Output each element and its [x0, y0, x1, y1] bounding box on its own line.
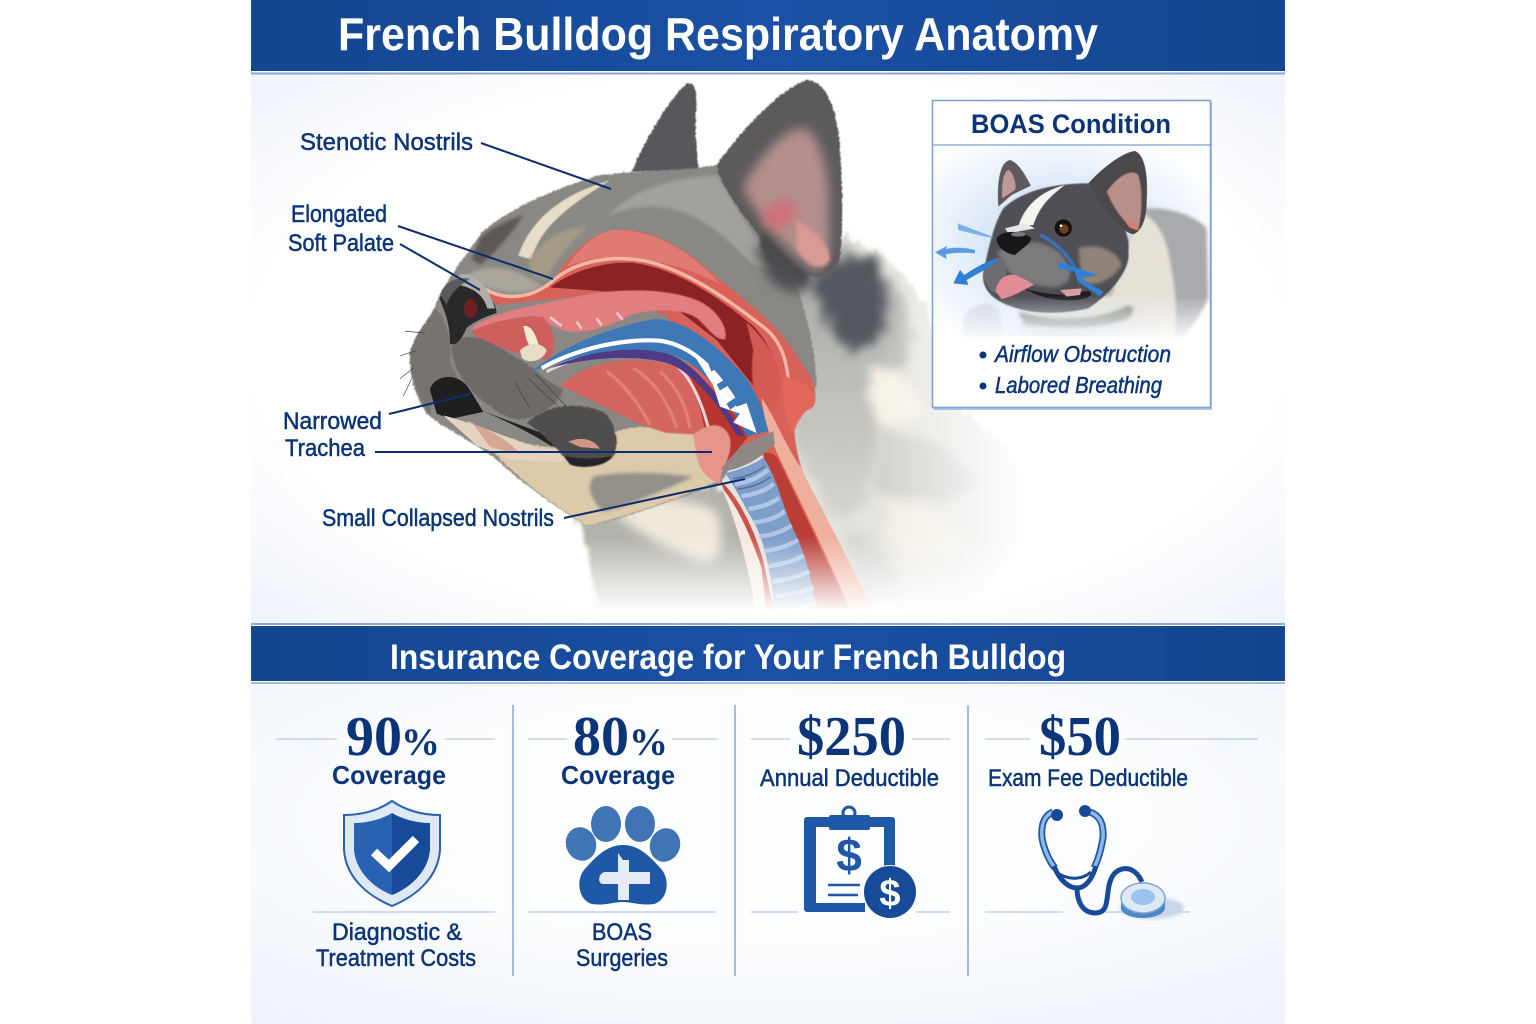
stat: 90% coverage: 90: [346, 706, 402, 768]
trachea rings: [725, 458, 817, 608]
leader lines: narrowed trachea: [375, 394, 712, 452]
stat: $50 exam fee deductible: Exam Fee Deductible: [988, 765, 1188, 792]
label: elongated soft palate: Elongated: [291, 201, 387, 228]
anatomical illustration: french bulldog head cross-section: [400, 78, 990, 608]
stat: 90% coverage: Coverage: [332, 760, 446, 790]
stat: 80% coverage: Surgeries: [576, 945, 668, 972]
stat: 90% coverage: Treatment Costs: [316, 945, 476, 972]
dark pharynx cavity: [550, 263, 777, 396]
stat: $250 annual deductible: $250: [797, 706, 906, 768]
soft palate band: [488, 229, 849, 606]
stat: 80% coverage: [561, 706, 685, 972]
icon: paw with medical cross: [561, 806, 685, 905]
airflow arrows: [935, 223, 1103, 297]
bullet list: Airflow Obstruction: [993, 341, 1171, 367]
stat: 80% coverage: BOAS: [592, 919, 652, 946]
muzzle: [410, 308, 617, 467]
stat: 80% coverage: Coverage: [561, 760, 675, 790]
pale lingual strip: [547, 352, 708, 428]
airway white streak and arrow: [542, 340, 757, 433]
blue airway: [532, 319, 768, 436]
palate pale line: [486, 256, 790, 378]
leader line: small collapsed nostrils: [564, 479, 745, 518]
bullet list: [980, 341, 1171, 398]
right pale tissue band: [762, 398, 868, 604]
forehead stripes: [518, 180, 610, 259]
icon: stethoscope: [1042, 805, 1184, 919]
bullet list: Labored Breathing: [995, 372, 1162, 398]
upper lip: [452, 337, 563, 420]
label: narrowed trachea: [283, 408, 382, 462]
section heading: Insurance Coverage for Your French Bulldog: [390, 638, 1066, 677]
leader lines: elongated soft palate: [398, 226, 553, 290]
label: stenotic nostrils: Stenotic Nostrils: [300, 129, 473, 156]
skull: [411, 165, 817, 526]
label: elongated soft palate: Soft Palate: [288, 230, 394, 257]
icon: clipboard with dollar: [804, 807, 917, 919]
label: narrowed trachea: Narrowed: [283, 408, 382, 435]
stat: $50 exam fee deductible: [988, 706, 1188, 919]
title: French Bulldog Respiratory Anatomy: [338, 8, 1098, 60]
pink epiglottis flap: [693, 425, 731, 484]
near ear: [717, 80, 842, 278]
stat: $250 annual deductible: [760, 706, 939, 919]
inner cheek: [472, 317, 554, 359]
whiskers: [400, 331, 567, 408]
gray larynx cap: [722, 431, 775, 472]
stat: 80% coverage: %: [629, 721, 668, 764]
jaw tan fur: [467, 421, 720, 526]
coverage background: [251, 682, 1285, 1024]
panel heading: BOAS Condition: [971, 109, 1171, 139]
panel: BOAS condition: [932, 100, 1212, 410]
laryngeal dark red: [690, 376, 749, 462]
lower neck fur: [581, 486, 753, 600]
title banner: [251, 0, 1285, 74]
left neck strip: [720, 480, 773, 607]
esophagus: [764, 452, 842, 594]
icon: shield with check: [344, 801, 440, 906]
stat: 90% coverage: Diagnostic &: [332, 919, 462, 946]
icon: clipboard with dollar: $: [879, 873, 901, 915]
stat: 90% coverage: [316, 706, 476, 972]
pharyngeal red: [746, 322, 780, 411]
far ear: [632, 83, 699, 172]
label: elongated soft palate: [288, 201, 394, 257]
purple airway shadow: [550, 350, 745, 436]
neck and body fur: [572, 230, 990, 598]
label: small collapsed nostrils: Small Collapsed Nostrils: [322, 505, 554, 532]
stat: $250 annual deductible: Annual Deductible: [760, 765, 939, 792]
stat: 90% coverage: %: [401, 721, 440, 764]
leader line: stenotic nostrils: [481, 143, 611, 189]
illustration: panting french bulldog: [935, 151, 1208, 356]
label: narrowed trachea: Trachea: [285, 435, 366, 462]
tooth: [520, 326, 547, 361]
nose: [439, 274, 497, 344]
anatomy background: [251, 72, 1285, 624]
stat: $50 exam fee deductible: $50: [1039, 706, 1121, 768]
lower airway red: [560, 359, 704, 435]
soft palate ridge: [567, 230, 720, 284]
icon: clipboard with dollar: $: [836, 829, 862, 881]
elongated soft palate tongue: [472, 290, 726, 339]
stat: 80% coverage: 80: [573, 706, 629, 768]
section banner: [251, 623, 1285, 684]
